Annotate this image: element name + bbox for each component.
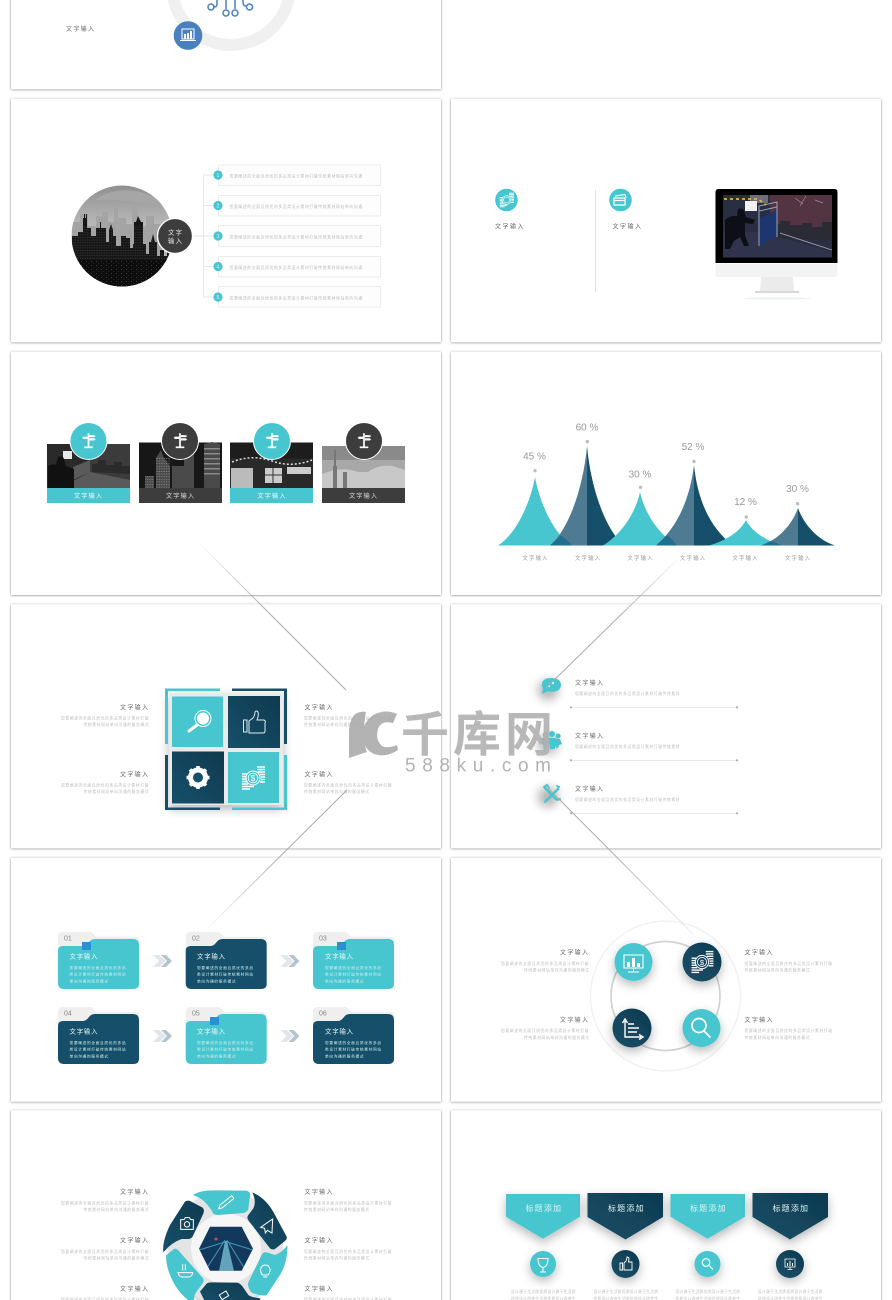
text block: bottom right: 文字输入 <box>304 770 332 778</box>
tile: search <box>172 696 223 747</box>
column 2: 设计源于生活质优质设计源于生活质 <box>594 1289 658 1294</box>
row 5: 5 <box>217 295 220 301</box>
text block: top right: 文字输入 <box>304 703 332 711</box>
column 2 <box>588 1193 663 1300</box>
label: 文字输入 <box>495 222 524 230</box>
folder 06: 文字输入 <box>325 1026 354 1035</box>
arrow <box>280 955 300 967</box>
card 3 <box>230 422 313 503</box>
folder 01: 您要阐述的全面且质优的多品 <box>70 965 126 970</box>
card 3: 文字输入 <box>258 492 286 500</box>
column 2: 标题添加 <box>608 1203 644 1213</box>
value labels: 60 % <box>576 422 599 434</box>
folder 04: 单向沟通的服务模式 <box>70 1054 108 1058</box>
text block: left 3 <box>61 1285 149 1300</box>
logo url: 588ku.com <box>405 756 551 776</box>
segment: camera <box>163 1201 204 1252</box>
text block: right 1: 传统素材网站单向沟通的服务模式 <box>304 1207 369 1212</box>
slide panel: hexagon <box>11 1110 441 1300</box>
text block: right 3: 文字输入 <box>304 1285 332 1293</box>
column 4 <box>752 1193 828 1300</box>
row text 3 <box>575 785 680 802</box>
text block: right 2: 您要阐述的全面且质优的多品类设计素材打破 <box>304 1249 392 1254</box>
column 1: 标题添加 <box>526 1203 561 1213</box>
folder 01: 01 <box>64 936 72 942</box>
row text 2 <box>575 732 680 749</box>
text block: top left: 文字输入 <box>120 703 148 711</box>
folder 04 <box>58 1007 139 1064</box>
category labels: 文字输入 <box>732 554 758 562</box>
text block: bottom left: 您要阐述的全面且质优的多品类设计素材打破 <box>61 782 149 788</box>
text block: left 1: 传统素材网站单向沟通的服务模式 <box>84 1207 149 1212</box>
text block: left 1 <box>61 1188 149 1212</box>
text block: right 2 <box>304 1236 392 1260</box>
text block: top left <box>61 703 149 727</box>
folder 04: 04 <box>64 1010 72 1018</box>
badge: text input: 文字 <box>168 228 182 236</box>
row 5: 您要阐述的全面且质优的多品类设计素材打破传统素材网站单向沟通 <box>230 296 362 300</box>
folder 05: 类设计素材打破传统素材网站 <box>197 1047 253 1052</box>
card 2 <box>139 422 222 503</box>
image: office at night <box>723 195 832 258</box>
folder 02: 02 <box>192 936 200 942</box>
category labels: 文字输入 <box>680 554 706 562</box>
folder 04: 文字输入 <box>70 1026 98 1035</box>
slide panel: four pentagons <box>451 1110 881 1300</box>
folder 05: 单向沟通的服务模式 <box>197 1054 236 1058</box>
folder 01 <box>58 932 139 989</box>
icon: people <box>538 731 562 754</box>
text block: bottom left <box>61 770 149 794</box>
category labels: 文字输入 <box>575 554 601 562</box>
text block: left 2: 文字输入 <box>120 1236 148 1244</box>
circle: chart <box>614 943 652 981</box>
text block: lower left <box>501 1016 589 1040</box>
folder 04: 类设计素材打破传统素材网站 <box>70 1047 126 1052</box>
label: 文字输入 <box>612 222 641 230</box>
text block: upper left: 您要阐述的全面且质优的多品类设计素材打破 <box>501 961 589 966</box>
image: city circle <box>72 186 170 286</box>
slide panel: city with five rows <box>11 99 441 342</box>
folder 04: 您要阐述的全面且质优的多品 <box>70 1040 126 1045</box>
text block: lower left: 传统素材网站单向沟通的服务模式 <box>524 1035 589 1040</box>
card 4 <box>322 422 405 503</box>
slide panel: ring with four circles <box>451 858 881 1102</box>
circle: search <box>682 1009 720 1047</box>
icon: card badge <box>609 189 632 211</box>
logo mark <box>349 712 398 758</box>
icon: circuit <box>208 0 252 16</box>
connector lines <box>193 175 214 297</box>
watermark logo <box>349 695 553 776</box>
folder 06: 您要阐述的全面且质优的多品 <box>325 1040 381 1045</box>
card 4: 文字输入 <box>349 492 377 500</box>
slide panel: peak chart <box>451 352 881 595</box>
icon: blue chart badge <box>174 21 202 50</box>
text block: right 2: 文字输入 <box>304 1236 332 1244</box>
text block: right 1 <box>304 1188 392 1212</box>
arrow <box>280 1030 300 1042</box>
label: text input: 文字输入 <box>66 25 94 33</box>
circle: axis chart <box>612 1008 652 1048</box>
row text 1 <box>575 679 680 696</box>
folder 02: 您要阐述的全面且质优的多品 <box>197 965 253 970</box>
folder 06: 类设计素材打破传统素材网站 <box>325 1047 381 1052</box>
text block: upper left: 传统素材网站单向沟通的服务模式 <box>524 968 589 972</box>
badge: text input <box>158 218 192 254</box>
folder 05: 05 <box>192 1010 200 1018</box>
image: center hexagon <box>199 1226 254 1271</box>
folder 01: 单向沟通的服务模式 <box>70 978 108 984</box>
text block: top right: 您要阐述的全面且质优的多品类设计素材打破 <box>304 716 392 720</box>
row 2: 您要阐述的全面且质优的多品类设计素材打破传统素材网站单向沟通 <box>230 204 362 209</box>
row 2: 2 <box>217 204 220 210</box>
arrow <box>153 955 172 967</box>
icon: chat <box>538 678 561 700</box>
text block: top right <box>304 703 392 727</box>
row 3: 您要阐述的全面且质优的多品类设计素材打破传统素材网站单向沟通 <box>230 234 362 240</box>
tile: thumbs up <box>228 696 280 748</box>
segment: bowl <box>166 1249 204 1300</box>
folder 03: 类设计素材打破传统素材网站 <box>325 972 381 977</box>
text block: left 2 <box>61 1236 149 1260</box>
row text 2: 文字输入 <box>575 732 603 740</box>
text block: left 3: 文字输入 <box>120 1285 148 1293</box>
value labels: 45 % <box>523 452 546 462</box>
text block: upper right: 您要阐述的全面且质优的多品类设计素材打破 <box>744 961 832 966</box>
rings <box>590 921 740 1071</box>
category labels: 文字输入 <box>522 554 548 562</box>
text block: upper right <box>744 948 832 972</box>
row text 3: 文字输入 <box>575 785 603 793</box>
data markers <box>533 440 799 519</box>
text block: upper right: 文字输入 <box>744 948 772 956</box>
text block: lower right <box>744 1016 832 1040</box>
hexagon ring <box>163 1190 287 1300</box>
logo text: 千库网 <box>401 695 553 765</box>
card 2: 文字输入 <box>166 492 194 500</box>
column 3: 标题添加 <box>690 1203 726 1213</box>
folder 05 <box>186 1007 267 1064</box>
card 1: 文字输入 <box>74 492 102 500</box>
value labels: 30 % <box>629 470 652 480</box>
folder 05: 您要阐述的全面且质优的多品 <box>197 1040 253 1045</box>
row text 3: 您要阐述的全面且质优的多品类设计素材打破传统素材 <box>575 797 680 802</box>
ring <box>172 0 290 45</box>
slide panel: six folders <box>11 858 441 1102</box>
text block: left 1: 文字输入 <box>120 1188 148 1196</box>
folder 06: 06 <box>319 1010 327 1018</box>
row text 1: 您要阐述的全面且质优的多品类设计素材打破传统素材 <box>575 691 680 696</box>
category labels <box>522 554 811 562</box>
folder 03: 03 <box>319 936 327 942</box>
slide panel: top partial circuit <box>11 0 441 89</box>
row 5 <box>213 286 380 307</box>
tile: coins: $ <box>251 774 256 783</box>
row 1: 1 <box>217 173 220 179</box>
folder 06: 单向沟通的服务模式 <box>325 1054 364 1058</box>
card 1 <box>47 422 130 503</box>
text block: bottom right: 传统素材网站单向沟通的服务模式 <box>304 789 369 794</box>
text block: bottom left: 文字输入 <box>120 770 148 778</box>
icon: tools <box>538 785 560 807</box>
column 4: 设计源于生活质优质设计源于生活质 <box>758 1289 823 1294</box>
arrow <box>153 1030 172 1042</box>
folder 02: 文字输入 <box>197 952 226 960</box>
bracket frame <box>165 688 287 810</box>
folder 06 <box>313 1007 394 1064</box>
column 1 <box>506 1194 580 1300</box>
icon: money badge <box>495 189 518 211</box>
text block: right 1: 文字输入 <box>304 1188 332 1196</box>
text block: right 1: 您要阐述的全面且质优的多品类设计素材打破 <box>304 1200 392 1206</box>
text block: bottom right: 您要阐述的全面且质优的多品类设计素材打破 <box>304 782 392 788</box>
text block: lower right: 您要阐述的全面且质优的多品类设计素材打破 <box>744 1028 832 1033</box>
value labels: 12 % <box>734 497 757 508</box>
text block: lower left: 文字输入 <box>560 1016 588 1024</box>
text block: left 1: 您要阐述的全面且质优的多品类设计素材打破 <box>61 1200 149 1206</box>
row 2 <box>213 196 380 216</box>
row text 1: 文字输入 <box>575 679 603 687</box>
segment: rocket <box>200 1282 261 1300</box>
row text 2: 您要阐述的全面且质优的多品类设计素材打破传统素材 <box>575 744 680 749</box>
text block: lower left: 您要阐述的全面且质优的多品类设计素材打破 <box>501 1028 589 1033</box>
circle: coins: $ <box>700 958 705 967</box>
chart: peaks <box>498 446 835 546</box>
tile: coins <box>228 752 279 803</box>
folder 01: 类设计素材打破传统素材网站 <box>70 972 126 977</box>
segment: pencil <box>193 1190 250 1215</box>
category labels: 文字输入 <box>785 554 811 562</box>
row 1 <box>213 165 380 186</box>
value labels <box>523 422 809 508</box>
row 4 <box>213 256 380 277</box>
text block: left 2: 传统素材网站单向沟通的服务模式 <box>84 1256 149 1260</box>
row 3: 3 <box>217 234 220 240</box>
badge: text input: 输入 <box>168 236 183 245</box>
text block: top right: 传统素材网站单向沟通的服务模式 <box>304 722 369 727</box>
row 1: 您要阐述的全面且质优的多品类设计素材打破传统素材网站单向沟通 <box>230 174 362 178</box>
circle: coins <box>682 942 722 982</box>
folder 05: 文字输入 <box>197 1026 226 1035</box>
text block: left 2: 您要阐述的全面且质优的多品类设计素材打破 <box>61 1249 149 1254</box>
value labels: 52 % <box>682 442 705 453</box>
row 4: 您要阐述的全面且质优的多品类设计素材打破传统素材网站单向沟通 <box>230 265 362 270</box>
folder 02 <box>186 932 267 989</box>
text block: top left: 传统素材网站单向沟通的服务模式 <box>84 722 149 727</box>
watermark diagonal lines <box>197 541 696 937</box>
folder 02: 单向沟通的服务模式 <box>197 978 236 984</box>
column 3 <box>670 1194 745 1300</box>
text block: upper left <box>501 948 589 972</box>
tile: gear <box>172 752 224 804</box>
folder 02: 类设计素材打破传统素材网站 <box>197 972 253 977</box>
category labels: 文字输入 <box>628 554 653 562</box>
slide panel: three icon rows <box>451 604 881 848</box>
row 4: 4 <box>217 264 220 270</box>
value labels: 30 % <box>786 484 809 495</box>
segment: bulb <box>248 1245 287 1296</box>
slide panel: icons and monitor <box>451 99 881 342</box>
text block: bottom left: 传统素材网站单向沟通的服务模式 <box>84 789 149 794</box>
folder 03: 单向沟通的服务模式 <box>325 978 364 984</box>
slide panel: four tiles <box>11 604 441 848</box>
folder 03: 您要阐述的全面且质优的多品 <box>325 965 381 970</box>
text block: right 2: 传统素材网站单向沟通的服务模式 <box>304 1256 369 1260</box>
column 1: 设计源于生活质优质设计源于生活质 <box>511 1289 576 1294</box>
text block: upper left: 文字输入 <box>560 948 588 956</box>
text block: bottom right <box>304 770 392 794</box>
row 3 <box>213 226 380 246</box>
text block: lower right: 传统素材网站单向沟通的服务模式 <box>744 1035 810 1040</box>
segment: paper plane <box>247 1192 287 1250</box>
folder 01: 文字输入 <box>70 952 98 960</box>
text block: lower right: 文字输入 <box>744 1016 772 1024</box>
column 4: 标题添加 <box>772 1203 808 1213</box>
text block: top left: 您要阐述的全面且质优的多品类设计素材打破 <box>61 716 149 720</box>
text block: upper right: 传统素材网站单向沟通的服务模式 <box>744 968 810 972</box>
column 3: 设计源于生活质优质设计源于生活质 <box>676 1289 740 1294</box>
text block: right 3 <box>304 1285 392 1300</box>
monitor <box>716 189 838 300</box>
slide panel: four photo cards <box>11 352 441 595</box>
folder 03: 文字输入 <box>325 952 354 960</box>
folder 03 <box>313 932 394 989</box>
